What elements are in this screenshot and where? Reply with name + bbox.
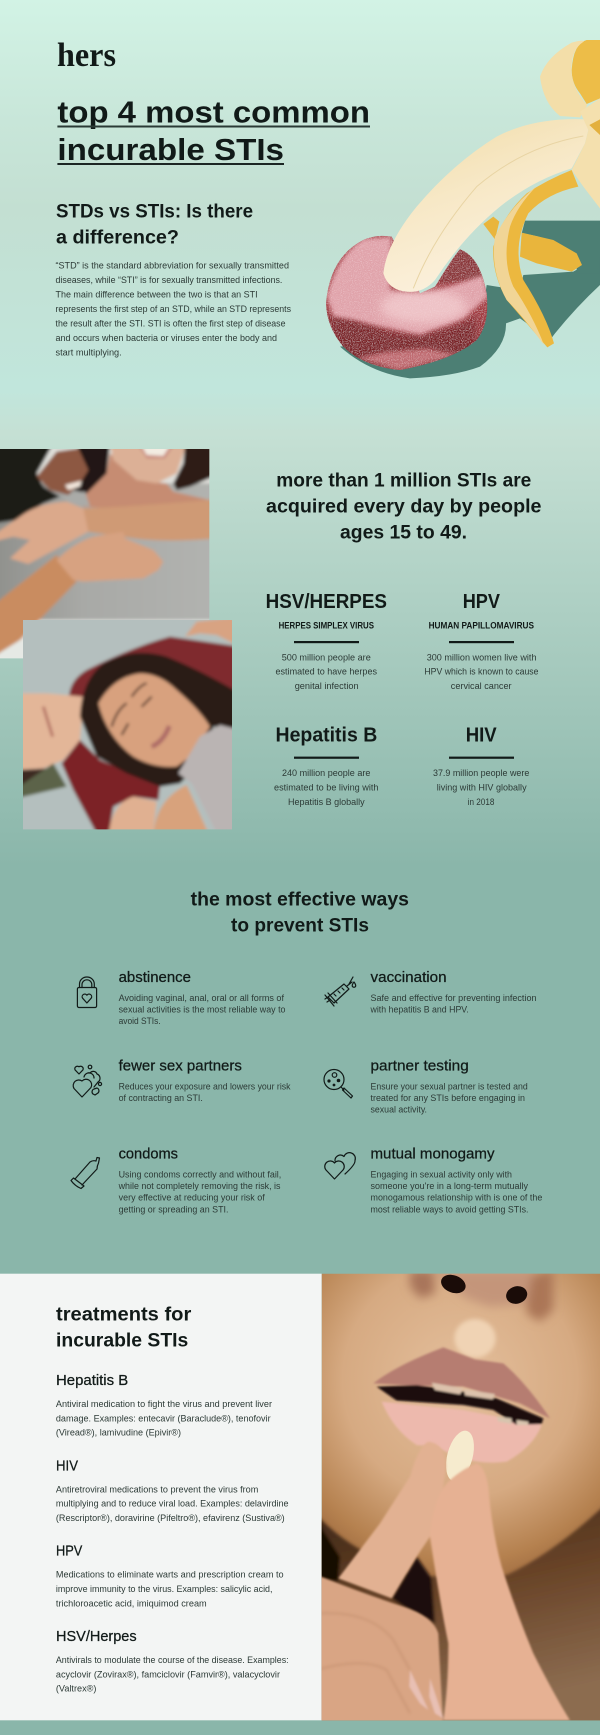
prevention: mutual monogamy: most reliable ways to avoid getting STIs. <box>370 1204 528 1215</box>
icon: two hearts <box>325 1153 355 1179</box>
intro text block: and occurs when bacteria or viruses enter the body and <box>56 333 277 344</box>
treatment: Hepatitis B <box>56 1373 273 1439</box>
stat: HSV/Herpes: HERPES SIMPLEX VIRUS <box>279 621 374 631</box>
curled peel <box>493 170 578 347</box>
prevention: condoms: getting or spreading an STI. <box>119 1204 228 1215</box>
intro text block: represents the first step of an STD, while an STD represents <box>56 304 291 315</box>
heading: most effective ways <box>191 888 409 936</box>
treatment: HSV/Herpes: Antivirals to modulate the course of the disease. Examples: <box>56 1655 289 1666</box>
stat: HSV/Herpes: 500 million people are <box>282 652 371 663</box>
stat: HSV/Herpes: HSV/HERPES <box>266 591 387 613</box>
heading: more than 1 million STIs: acquired every day by people <box>266 496 542 518</box>
banana <box>383 119 588 292</box>
prevention: partner testing: treated for any STIs before engaging in <box>370 1093 525 1104</box>
prevention: vaccination: with hepatitis B and HPV. <box>370 1005 469 1016</box>
stat: HPV: HUMAN PAPILLOMAVIRUS <box>429 621 534 631</box>
prevention: mutual monogamy: Engaging in sexual activity only with <box>370 1170 512 1181</box>
intro text block: start multiplying. <box>56 348 122 358</box>
prevention: condoms: condoms <box>119 1146 178 1162</box>
stat: HSV/Herpes: estimated to have herpes <box>276 667 377 678</box>
treatment: HPV: trichloroacetic acid, imiquimod cream <box>56 1598 207 1609</box>
intro text block: diseases, while “STI” is for sexually transmitted infections. <box>56 275 282 286</box>
heading: treatments: treatments for <box>56 1304 192 1326</box>
photos of couples <box>0 443 240 837</box>
prevention: abstinence: avoid STIs. <box>119 1016 161 1027</box>
index finger <box>338 1442 446 1598</box>
intro text block: “STD” is the standard abbreviation for sexually transmitted <box>56 261 289 272</box>
pill <box>446 1430 474 1480</box>
prevention: partner testing: sexual activity. <box>370 1105 427 1116</box>
photo: banana and donut <box>320 40 600 378</box>
stat: Hepatitis B: Hepatitis B globally <box>288 797 365 808</box>
neck and chin shadow <box>317 1503 600 1727</box>
photo: lips and pill <box>317 1270 600 1727</box>
treatment: Hepatitis B: Hepatitis B <box>56 1373 128 1389</box>
prevention: condoms: Using condoms correctly and without fail, <box>119 1170 281 1181</box>
stat: HPV <box>424 591 538 692</box>
treatment: HSV/Herpes <box>56 1629 289 1695</box>
stat: HIV: living with HIV globally <box>437 782 527 793</box>
stat: HIV: in 2018 <box>468 797 494 808</box>
heading: more than 1 million STIs <box>266 470 542 544</box>
stat: HPV: HPV which is known to cause <box>424 667 538 678</box>
title: top 4 most common <box>57 95 370 130</box>
treatment: HPV: Medications to eliminate warts and prescription cream to <box>56 1570 284 1581</box>
middle finger <box>430 1463 570 1720</box>
title <box>57 95 370 167</box>
treatment: HIV: multiplying and to reduce viral load. Examples: delavirdine <box>56 1499 289 1510</box>
stat: HPV: 300 million women live with <box>427 652 536 663</box>
heading: more than 1 million STIs: ages 15 to 49. <box>340 522 467 544</box>
fist <box>317 1575 443 1727</box>
treatment: HPV: HPV <box>56 1544 83 1560</box>
prevention: abstinence <box>77 970 286 1027</box>
prevention: fewer sex partners: of contracting an STI. <box>119 1093 203 1104</box>
heading: STDs vs STIs: a difference? <box>56 226 179 248</box>
stat: HSV/Herpes <box>266 591 387 692</box>
icon: padlock with heart <box>77 977 97 1008</box>
prevention: mutual monogamy: mutual monogamy <box>370 1146 495 1162</box>
treatment: HIV <box>56 1458 289 1524</box>
prevention: fewer sex partners <box>73 1058 291 1104</box>
icon: syringe <box>325 977 356 1006</box>
stat: HIV: HIV <box>466 724 497 746</box>
prevention: vaccination: Safe and effective for preventing infection <box>370 993 536 1004</box>
prevention: condoms: very effective at reducing your risk of <box>119 1193 265 1204</box>
stat: Hepatitis B: estimated to be living with <box>274 782 378 793</box>
prevention: abstinence: abstinence <box>119 970 191 986</box>
logo: hers <box>57 37 116 74</box>
heading: STDs vs STIs <box>56 200 253 248</box>
treatment: Hepatitis B: damage. Examples: entecavir (Baraclude®), tenofovir <box>56 1413 271 1424</box>
intro text block <box>56 261 291 358</box>
prevention: mutual monogamy <box>325 1146 542 1215</box>
treatment: HIV: HIV <box>56 1458 78 1474</box>
icon: condom <box>71 1158 100 1188</box>
heading: more than 1 million STIs: more than 1 million STIs are <box>276 470 531 492</box>
stat: Hepatitis B <box>274 724 378 808</box>
stat: HSV/Herpes: genital infection <box>295 681 359 692</box>
nose <box>410 1270 553 1322</box>
prevention: partner testing: partner testing <box>370 1058 469 1074</box>
prevention: mutual monogamy: someone you're in a long-term mutually <box>370 1181 528 1192</box>
heading: most effective ways: the most effective ways <box>191 888 409 910</box>
prevention: vaccination: vaccination <box>370 970 447 986</box>
heading: treatments: incurable STIs <box>56 1330 188 1352</box>
stat: HIV: 37.9 million people were <box>433 768 529 779</box>
heading: STDs vs STIs: STDs vs STIs: Is there <box>56 200 253 222</box>
prevention: fewer sex partners: Reduces your exposure and lowers your risk <box>119 1081 291 1092</box>
stat: HIV <box>433 724 529 808</box>
stat: HPV: HPV <box>463 591 501 613</box>
cast shadow <box>340 221 600 378</box>
heading: most effective ways: to prevent STIs <box>231 914 369 936</box>
intro text block: The main difference between the two is that an STI <box>56 290 258 301</box>
stat: HPV: cervical cancer <box>451 681 512 692</box>
fingers and hand <box>317 1442 570 1727</box>
title: incurable STIs <box>57 132 284 167</box>
intro text block: the result after the STI. STI is often the first step of disease <box>56 318 286 330</box>
right peel <box>572 98 600 208</box>
heading: treatments <box>56 1304 192 1352</box>
icon: magnifying glass <box>324 1070 352 1098</box>
panel: treatments <box>0 1274 322 1720</box>
treatment: HIV: (Rescriptor®), doravirine (Pifeltro®), efavirenz (Sustiva®) <box>56 1513 285 1524</box>
photo: couple lying down <box>23 620 232 830</box>
photo: embracing couple <box>0 443 217 663</box>
prevention: condoms: while not completely removing the risk, is <box>118 1181 281 1192</box>
prevention: vaccination <box>325 970 536 1016</box>
donut <box>326 236 488 370</box>
prevention: condoms <box>71 1146 281 1215</box>
prevention: abstinence: sexual activities is the most reliable way to <box>119 1005 285 1016</box>
prevention: mutual monogamy: monogamous relationship with is one of the <box>370 1193 542 1204</box>
stat: Hepatitis B: Hepatitis B <box>276 724 377 746</box>
treatment: Hepatitis B: Antiviral medication to fight the virus and prevent liver <box>56 1399 273 1410</box>
prevention: abstinence: Avoiding vaginal, anal, oral or all forms of <box>119 993 284 1004</box>
upper peel <box>572 40 600 104</box>
lips <box>373 1347 550 1463</box>
hero section <box>56 37 600 378</box>
treatment: HIV: Antiretroviral medications to prevent the virus from <box>56 1484 258 1495</box>
treatment: HSV/Herpes: acyclovir (Zovirax®), famciclovir (Famvir®), valacyclovir <box>56 1669 281 1680</box>
icon: several hearts <box>73 1065 102 1097</box>
prevention: fewer sex partners: fewer sex partners <box>119 1058 242 1074</box>
stat: Hepatitis B: 240 million people are <box>282 768 370 779</box>
treatment: Hepatitis B: (Viread®), lamivudine (Epivir®) <box>56 1428 181 1439</box>
treatment: HSV/Herpes: HSV/Herpes <box>56 1629 137 1645</box>
treatment: HPV <box>56 1544 284 1609</box>
prevention: partner testing <box>324 1058 528 1116</box>
treatment: HPV: improve immunity to the virus. Examples: salicylic acid, <box>56 1584 273 1595</box>
back peel <box>483 217 582 272</box>
treatment: HSV/Herpes: (Valtrex®) <box>56 1684 96 1695</box>
prevention: partner testing: Ensure your sexual partner is tested and <box>370 1081 528 1092</box>
